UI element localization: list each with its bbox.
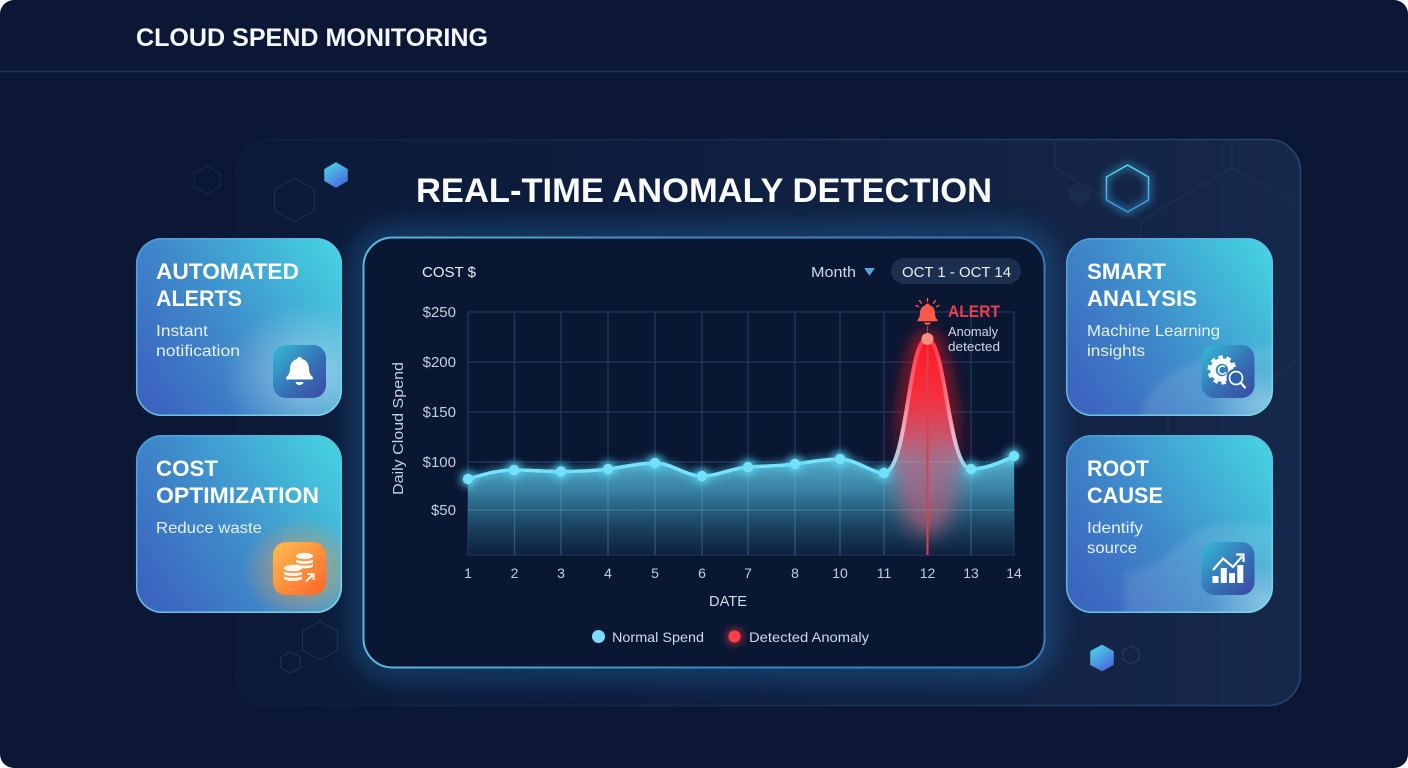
header title: CLOUD SPEND MONITORING bbox=[136, 24, 488, 52]
x axis labels: 3 bbox=[557, 565, 565, 581]
line: anomaly spike bbox=[884, 339, 971, 473]
card heading: COST bbox=[156, 456, 218, 481]
card description: notification bbox=[156, 343, 240, 360]
card heading: SMART bbox=[1087, 259, 1166, 284]
card description: Machine Learning bbox=[1087, 323, 1220, 340]
period dropdown bbox=[811, 264, 874, 281]
line: normal spend bbox=[468, 456, 1014, 479]
glass backdrop panel bbox=[236, 140, 1300, 706]
x axis labels bbox=[464, 565, 1022, 581]
x axis labels: 6 bbox=[698, 565, 706, 581]
alert callout text: detected bbox=[948, 340, 1000, 354]
card: root cause bbox=[1066, 435, 1274, 613]
card description: Instant bbox=[156, 323, 209, 340]
main heading: REAL-TIME ANOMALY DETECTION bbox=[416, 172, 992, 210]
alert callout text bbox=[948, 303, 1000, 354]
x axis labels: 12 bbox=[920, 565, 935, 581]
date range pill bbox=[891, 258, 1021, 284]
card description: insights bbox=[1087, 343, 1145, 360]
card heading: CAUSE bbox=[1087, 483, 1163, 508]
icon: alert bell bbox=[916, 298, 939, 333]
card description: Identify bbox=[1087, 520, 1143, 537]
y axis labels: $50 bbox=[431, 502, 456, 519]
decorative hexagons bbox=[194, 163, 1148, 673]
x axis labels: 7 bbox=[744, 565, 752, 581]
x axis title: DATE bbox=[709, 594, 747, 610]
card heading: AUTOMATED bbox=[156, 259, 299, 284]
icon: gear with magnifier bbox=[1202, 345, 1254, 398]
x axis labels: 13 bbox=[963, 565, 979, 581]
alert callout text: Anomaly bbox=[948, 325, 999, 339]
legend: Detected Anomaly bbox=[749, 629, 869, 645]
x axis labels: 10 bbox=[832, 565, 848, 581]
anomaly marker line bbox=[926, 339, 928, 555]
anomaly peak point bbox=[922, 333, 934, 345]
period dropdown: Month bbox=[811, 264, 856, 281]
date range pill: OCT 1 - OCT 14 bbox=[902, 265, 1011, 281]
alert callout text: ALERT bbox=[948, 303, 1000, 321]
card description: Reduce waste bbox=[156, 520, 262, 537]
chart axis title: cost: COST $ bbox=[422, 265, 476, 281]
card heading: OPTIMIZATION bbox=[156, 483, 319, 508]
icon: bell bbox=[273, 345, 326, 398]
x axis labels: 14 bbox=[1006, 565, 1022, 581]
card heading: ALERTS bbox=[156, 286, 242, 311]
x axis labels: 4 bbox=[604, 565, 612, 581]
y axis labels: $150 bbox=[423, 404, 456, 421]
y axis labels: $200 bbox=[423, 354, 456, 371]
icon: growth chart bbox=[1202, 542, 1254, 595]
card heading: ROOT bbox=[1087, 456, 1149, 481]
legend: Normal Spend bbox=[612, 629, 704, 645]
x axis labels: 8 bbox=[791, 565, 799, 581]
y axis labels: $100 bbox=[423, 454, 456, 471]
panel: chart bbox=[364, 238, 1044, 668]
card: cost optimization bbox=[136, 435, 342, 613]
legend bbox=[592, 628, 869, 645]
data points bbox=[463, 451, 1019, 484]
area: spend under the curve bbox=[468, 344, 1014, 555]
x axis labels: 11 bbox=[877, 565, 891, 581]
card description: source bbox=[1087, 540, 1137, 557]
card: smart analysis bbox=[1066, 238, 1274, 416]
x axis labels: 1 bbox=[464, 565, 472, 581]
card: automated alerts bbox=[136, 238, 342, 416]
icon: coins bbox=[273, 542, 326, 595]
y axis title: Daily Cloud Spend bbox=[390, 362, 407, 495]
x axis labels: 2 bbox=[511, 565, 519, 581]
y axis labels: $250 bbox=[423, 304, 456, 321]
card heading: ANALYSIS bbox=[1087, 286, 1197, 311]
y axis labels bbox=[423, 304, 456, 519]
x axis labels: 5 bbox=[651, 565, 659, 581]
